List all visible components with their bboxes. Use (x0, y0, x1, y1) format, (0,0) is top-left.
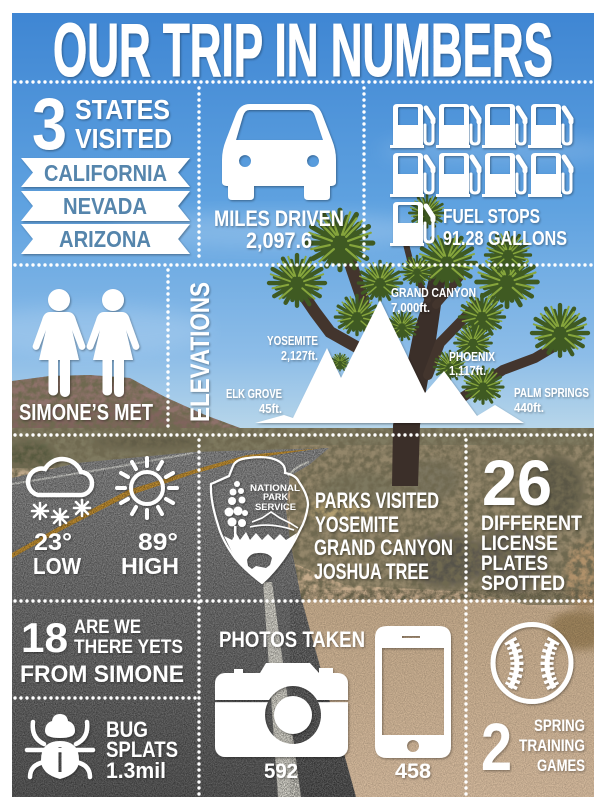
are we there yets text: THERE YETS (74, 636, 183, 658)
weather temperatures: HIGH (121, 553, 179, 579)
panel: spring training (481, 624, 585, 785)
from simone text: FROM SIMONE (20, 661, 184, 688)
panel: miles driven (214, 104, 344, 253)
weather temperatures (33, 529, 179, 579)
bug splats label: BUG (106, 717, 148, 742)
elevation labels: 1,117ft. (449, 364, 486, 378)
bug splats label (106, 717, 178, 783)
parks list: YOSEMITE (315, 512, 399, 537)
spring training games label: GAMES (537, 757, 585, 775)
camera count: 592 (264, 760, 298, 783)
parks list: JOSHUA TREE (314, 559, 429, 584)
bug splats label: 1.3mil (106, 758, 166, 783)
elevation labels (226, 286, 589, 416)
states visited text: STATES (75, 94, 170, 125)
ribbons: NEVADA (63, 193, 147, 219)
ribbons: ARIZONA (59, 226, 151, 252)
number 26: 26 (482, 447, 552, 519)
simone's met label: SIMONE’S MET (19, 399, 153, 425)
elevation labels: 45ft. (259, 402, 282, 416)
are we there yets text (74, 616, 183, 658)
miles driven label (214, 206, 344, 253)
license plates label: LICENSE (481, 531, 558, 555)
elevations heading: ELEVATIONS (185, 282, 215, 422)
photos taken heading: PHOTOS TAKEN (219, 627, 365, 652)
panel: weather (28, 458, 179, 579)
license plates label (481, 511, 582, 595)
elevation labels: 2,127ft. (281, 349, 318, 363)
elevation labels: PHOENIX (449, 350, 496, 364)
icon: national park service arrowhead: PARK (263, 492, 288, 502)
weather temperatures: 23° (34, 529, 72, 556)
icon: snow cloud (28, 459, 92, 525)
panel: states visited (21, 84, 190, 254)
panel: fuel stops (390, 104, 571, 250)
spring training games label: SPRING (534, 717, 585, 735)
panel: parks visited (211, 457, 453, 584)
bug splats label: SPLATS (106, 737, 178, 762)
elevation labels: YOSEMITE (267, 334, 318, 348)
fuel stops label (443, 206, 567, 250)
parks list: PARKS VISITED (315, 488, 439, 513)
elevation labels: ELK GROVE (226, 387, 282, 401)
panel: elevations (185, 282, 589, 423)
fuel stops label: 91.28 GALLONS (443, 228, 567, 250)
parks list: GRAND CANYON (314, 535, 453, 560)
states visited text (75, 94, 172, 154)
panel: photos taken (215, 626, 451, 783)
elevation labels: GRAND CANYON (391, 286, 476, 300)
number 3: 3 (32, 84, 67, 165)
weather temperatures: LOW (33, 553, 81, 579)
spring training games label: TRAINING (519, 737, 585, 755)
icon: bug (27, 714, 93, 779)
icon: camera (215, 663, 348, 757)
license plates label: SPOTTED (481, 571, 565, 595)
icon: car (222, 104, 336, 200)
icon: national park service arrowhead (211, 457, 308, 583)
ribbons (21, 158, 190, 254)
elevation labels: 440ft. (514, 401, 544, 415)
panel: bug splats (27, 714, 178, 783)
phone count: 458 (395, 760, 431, 783)
icon: baseball (493, 624, 571, 702)
miles driven label: 2,097.6 (246, 228, 312, 253)
miles driven label: MILES DRIVEN (214, 206, 344, 231)
icon: national park service arrowhead: SERVICE (255, 502, 296, 512)
icon: sun (117, 458, 177, 518)
icon: national park service arrowhead: NATIONAL (250, 483, 301, 493)
license plates label: DIFFERENT (481, 511, 582, 535)
icon: phone (375, 626, 451, 758)
parks list (314, 488, 453, 584)
panel: are we there yets (20, 614, 184, 688)
fuel stops label: FUEL STOPS (443, 206, 540, 228)
mountains chart (255, 300, 524, 423)
joshua tree (269, 195, 588, 486)
license plates label: PLATES (481, 551, 548, 575)
ribbons: CALIFORNIA (44, 160, 167, 186)
states visited text: VISITED (75, 123, 172, 154)
weather temperatures: 89° (138, 529, 178, 556)
elevation labels: PALM SPRINGS (514, 386, 589, 400)
spring training games label (519, 717, 585, 775)
panel: simone's met (19, 289, 153, 425)
elevation labels: 7,000ft. (391, 301, 430, 315)
are we there yets text: ARE WE (74, 616, 141, 638)
number 18: 18 (21, 614, 68, 661)
icon: two women (33, 289, 139, 397)
panel: license plates (481, 447, 582, 595)
icon: fuel pumps (390, 104, 571, 246)
number 2: 2 (481, 710, 512, 785)
